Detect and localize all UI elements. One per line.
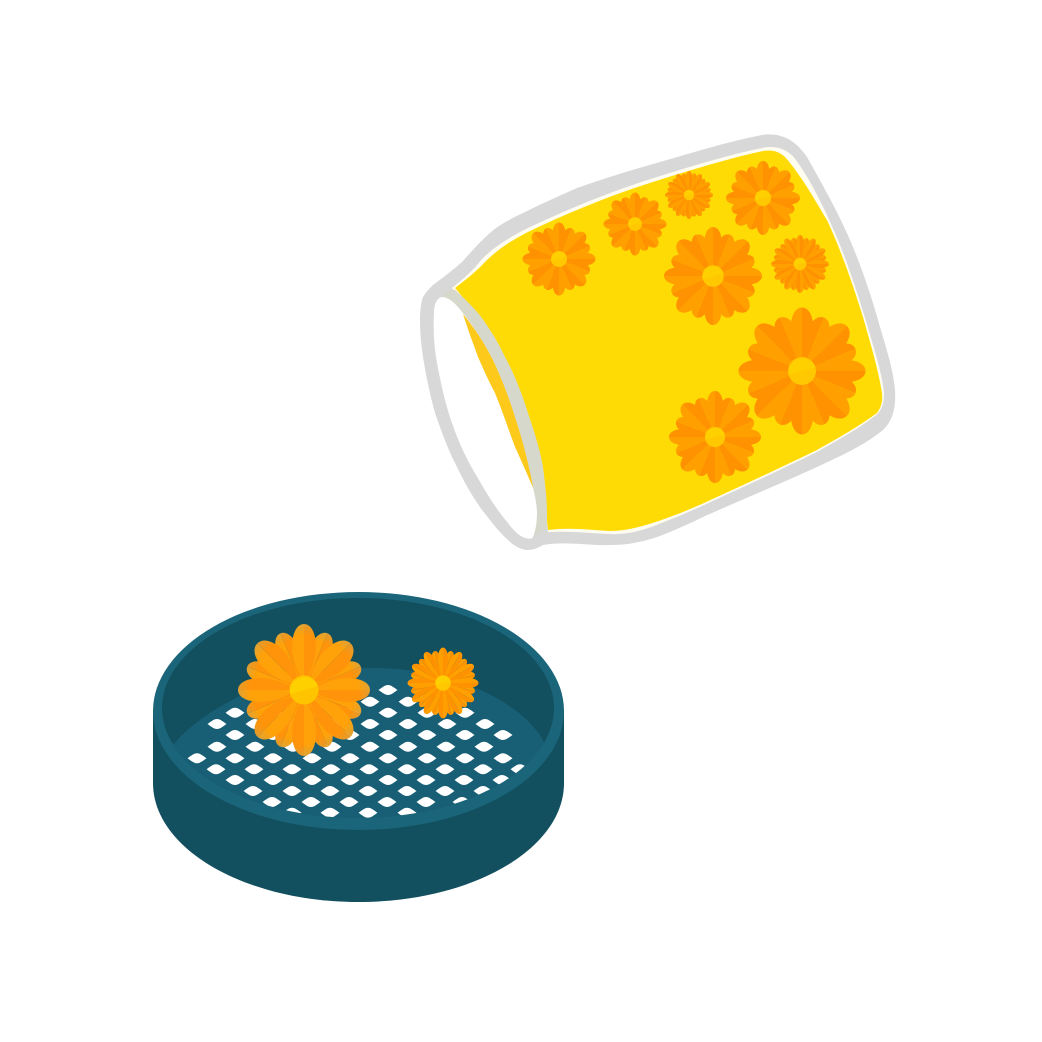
jar front rim	[442, 290, 547, 537]
flower	[771, 235, 829, 293]
sieve mesh floor	[174, 668, 544, 818]
flower in sieve: small	[408, 648, 478, 718]
flower	[665, 171, 713, 219]
jar liquid	[455, 150, 882, 531]
flower	[522, 222, 596, 296]
sieve inner wall	[162, 598, 554, 818]
liquid sliver seen through mouth	[463, 314, 534, 490]
mesh holes	[188, 685, 530, 818]
flower	[604, 192, 666, 256]
flower in sieve: large	[238, 624, 370, 756]
jar inner highlight	[452, 147, 884, 534]
flower	[669, 391, 761, 483]
sieve rim	[153, 592, 564, 830]
jar mouth opening	[434, 297, 537, 539]
flower	[726, 161, 800, 235]
jar outer glass	[420, 134, 895, 550]
flowers in jar	[522, 161, 866, 483]
sieve outer wall	[153, 711, 564, 902]
flower	[664, 227, 762, 325]
glass jar with yellow liquid	[420, 134, 895, 550]
sieve	[150, 592, 565, 902]
large flower	[738, 308, 866, 434]
